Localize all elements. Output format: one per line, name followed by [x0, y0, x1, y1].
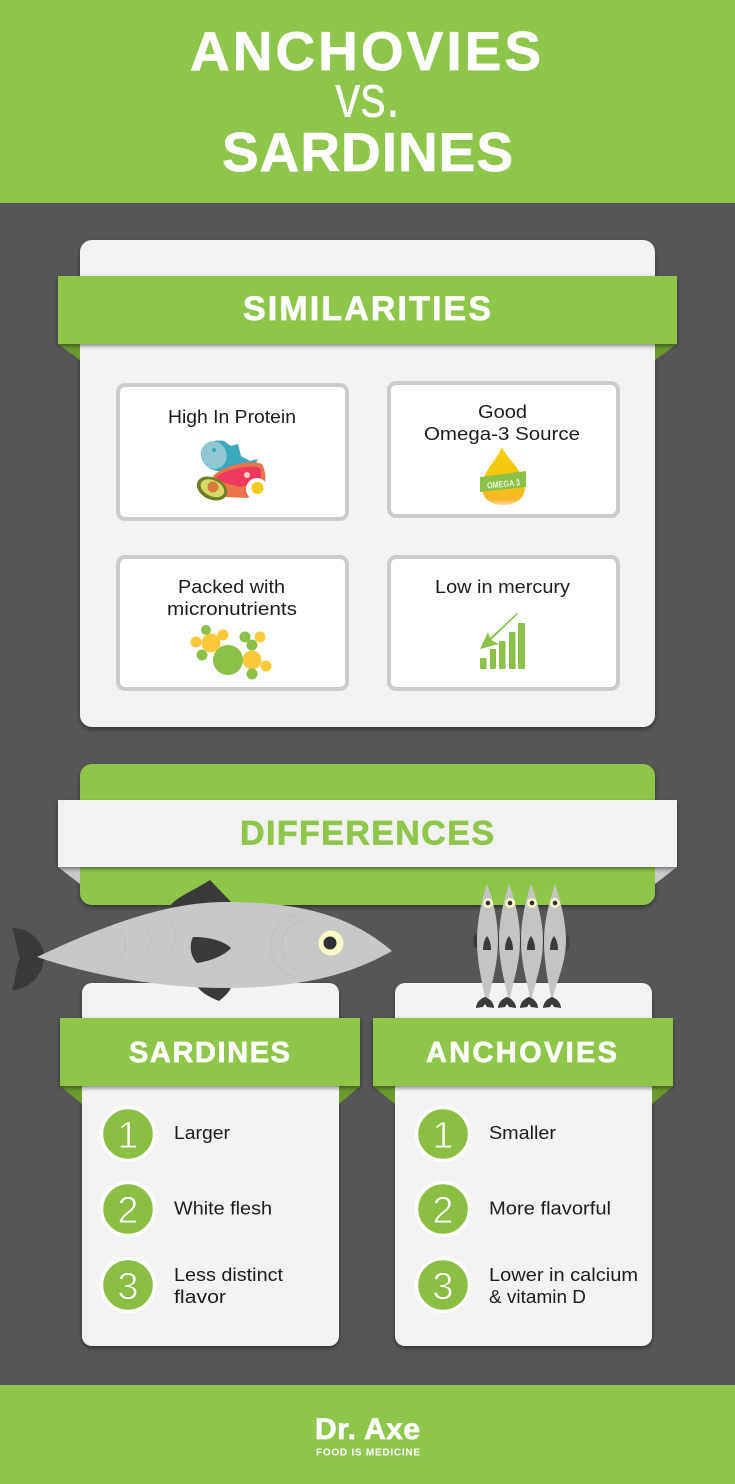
- card: packed with micronutrients: Packed with: [178, 576, 285, 597]
- list item 3: [102, 1258, 283, 1312]
- card: packed with micronutrients: micronutrients: [167, 598, 297, 619]
- title: ANCHOVIES: [190, 20, 541, 82]
- list item 3: Lower in calcium: [489, 1264, 638, 1285]
- title: SARDINES: [222, 121, 513, 183]
- footer: [0, 1385, 735, 1484]
- ribbon: sardines heading: [60, 1018, 360, 1104]
- anchovy 1: [476, 884, 498, 1008]
- icon: omega 3 oil drop: OMEGA 3: [487, 477, 520, 491]
- ribbon: sardines heading: SARDINES: [129, 1037, 290, 1069]
- icon: fish, steak, avocado and egg: [193, 438, 268, 505]
- list item 2: 2: [432, 1190, 454, 1232]
- list item 3: 3: [117, 1266, 139, 1308]
- ribbon: similarities heading: [58, 276, 677, 360]
- list item 1: Larger: [174, 1122, 230, 1143]
- list item 3: & vitamin D: [489, 1286, 586, 1307]
- logo: Dr. Axe: Dr. Axe: [315, 1413, 420, 1446]
- anchovy 2: [498, 884, 520, 1008]
- icon: omega 3 oil drop: [480, 447, 526, 505]
- panel: sardines: [60, 983, 360, 1346]
- ribbon: anchovies heading: ANCHOVIES: [426, 1037, 617, 1069]
- list item 1: [416, 1108, 556, 1160]
- card: good omega-3 source: [389, 383, 618, 516]
- list item 3: 3: [432, 1266, 454, 1308]
- list item 2: [416, 1182, 611, 1236]
- list item 1: Smaller: [489, 1122, 556, 1143]
- illustration: sardine: [12, 880, 392, 1001]
- title: vs.: [335, 63, 400, 130]
- card: low in mercury: [389, 557, 618, 689]
- ribbon: differences heading: [58, 800, 677, 867]
- icon: falling bar chart: [480, 613, 525, 669]
- ribbon: similarities heading: SIMILARITIES: [243, 290, 491, 328]
- list item 3: flavor: [174, 1286, 226, 1307]
- logo: Dr. Axe: FOOD IS MEDICINE: [316, 1448, 420, 1458]
- list item 3: Less distinct: [174, 1264, 283, 1285]
- title: [190, 20, 541, 183]
- list item 3: [416, 1258, 638, 1312]
- list item 1: 1: [432, 1115, 454, 1157]
- ribbon: anchovies heading: [373, 1018, 673, 1104]
- list item 2: White flesh: [174, 1198, 272, 1218]
- card: high in protein: High In Protein: [168, 406, 296, 427]
- icon: molecules: [190, 625, 272, 680]
- list item 1: 1: [117, 1115, 139, 1157]
- header: [0, 0, 735, 203]
- card: packed with micronutrients: [118, 557, 347, 689]
- panel: differences: [58, 764, 677, 905]
- card: low in mercury: Low in mercury: [435, 576, 571, 597]
- ribbon: differences heading: DIFFERENCES: [240, 814, 494, 852]
- list item 2: More flavorful: [489, 1198, 611, 1218]
- panel: similarities: [58, 240, 677, 727]
- list item 2: 2: [117, 1190, 139, 1232]
- illustration: anchovies: [474, 884, 570, 1008]
- card: high in protein: [118, 385, 347, 519]
- anchovy 4: [543, 884, 566, 1008]
- card: good omega-3 source: Good: [478, 401, 527, 422]
- card: good omega-3 source: Omega-3 Source: [424, 423, 580, 444]
- panel: anchovies: [373, 983, 673, 1346]
- list item 1: [102, 1108, 230, 1160]
- list item 2: [102, 1182, 272, 1236]
- anchovy 3: [520, 884, 543, 1008]
